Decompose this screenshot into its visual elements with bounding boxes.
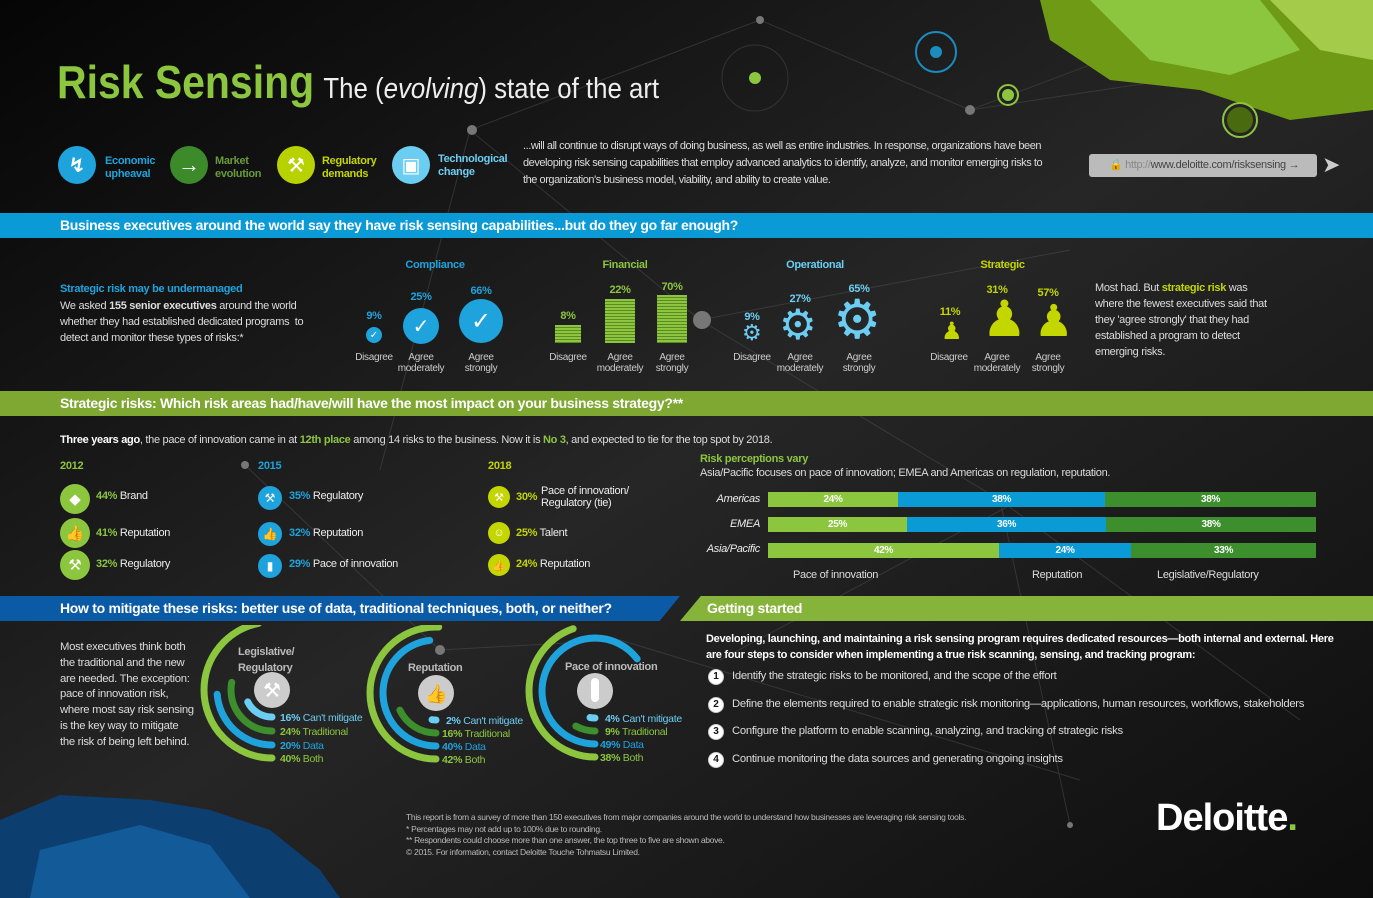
disruptors row: evolution (215, 168, 261, 180)
legislative: Legislative/ (238, 646, 295, 658)
panel: operational: ⚙ (833, 290, 881, 350)
logo: Deloitte: Deloitte. (1156, 797, 1297, 839)
url bar (1089, 154, 1317, 177)
panel: risk perceptions chart: 36% (997, 519, 1016, 530)
panel: 2015 (258, 460, 398, 578)
panel: 2018: 👍 (492, 560, 506, 572)
panel: 2012: 41% Reputation (96, 527, 170, 539)
panel: 2015: 29% Pace of innovation (289, 558, 398, 570)
steps list: Identify the strategic risks to be monitored, and the scope of the effort (732, 670, 1057, 682)
band: business executives: Business executives around the world say they have risk sensing capabilities...but do they go far enough? (60, 217, 738, 233)
panel: risk perceptions chart: Legislative/Regulatory (1157, 569, 1259, 581)
icon: regulatory demands: ⚒ (287, 154, 305, 176)
panel: financial (549, 259, 689, 374)
disruptors row (58, 146, 507, 184)
disruptors row: change (438, 166, 475, 178)
panel: strategic: Agree moderately (974, 352, 1020, 374)
text: most executives: Most executives think both the traditional and the new are needed. The exception: pace of innovation risk, where most say risk sensing is the key way to mitigate the risk of being left behind. (60, 641, 194, 748)
panel: risk perceptions chart: EMEA (730, 518, 760, 530)
panel: strategic: Agree strongly (1032, 352, 1064, 374)
band: getting started (680, 596, 1373, 621)
pace of innovation: Pace of innovation (565, 661, 658, 673)
panel: operational: 27% (789, 293, 811, 305)
panel: compliance: Agree strongly (465, 352, 497, 374)
legislative: 40% Both (280, 753, 324, 765)
panel: strategic: Disagree (930, 352, 968, 363)
panel: 2015: 32% Reputation (289, 527, 363, 539)
disruptors row: Market (215, 155, 249, 167)
panel: risk perceptions chart: 33% (1214, 545, 1233, 556)
panel: risk perceptions chart: Asia/Pacific (707, 543, 760, 555)
band: strategic risks (0, 391, 1373, 416)
panel: risk perceptions chart: Risk perceptions vary (700, 453, 808, 465)
panel: operational: Disagree (733, 352, 771, 363)
panel: 2015: ⚒ (265, 491, 275, 505)
band: business executives (0, 213, 1373, 238)
pace of innovation: 49% Data (600, 739, 644, 751)
panel: 2018: ☺ (493, 527, 505, 539)
chart: mitigation arcs (200, 625, 682, 766)
panel: risk perceptions chart: 42% (874, 545, 893, 556)
panel: 2012: 32% Regulatory (96, 558, 170, 570)
panel: strategic: ♟ (1034, 297, 1073, 346)
steps list: Continue monitoring the data sources and generating ongoing insights (732, 753, 1063, 765)
icon: technological change (392, 146, 430, 184)
panel: strategic: ♟ (941, 318, 962, 345)
steps list (708, 669, 1304, 768)
panel: 2015: ▮ (267, 559, 273, 573)
panel: risk perceptions chart: Asia/Pacific focuses on pace of innovation; EMEA and Americas on regulation, reputation. (700, 467, 1110, 479)
legislative: 16% Can't mitigate (280, 712, 363, 724)
panel: 2015: 2015 (258, 460, 281, 472)
legislative (204, 622, 363, 765)
disruptors row: Technological (438, 153, 507, 165)
reputation: 2% Can't mitigate (446, 715, 523, 727)
panel: compliance: ✓ (471, 308, 491, 334)
decorative blue polygons bottom-left (0, 795, 340, 898)
panel: 2015: 👍 (263, 527, 277, 541)
disruptors row: demands (322, 168, 368, 180)
panel: compliance: Compliance (405, 259, 465, 271)
icon: market evolution (170, 146, 208, 184)
panel: operational: 65% (848, 283, 870, 295)
panel: risk perceptions chart: 24% (1055, 545, 1075, 556)
pace of innovation (529, 625, 682, 764)
panel: financial: Agree strongly (656, 352, 688, 374)
text: strategic risk undermanaged: Strategic risk may be undermanaged (60, 283, 242, 295)
text: strategic note: Most had. But strategic risk was where the fewest executives said that they 'agree strongly' that they had established a program to detect emerging risks. (1095, 282, 1267, 358)
footnotes: This report is from a survey of more than 150 executives from major companies around the world to understand how businesses are leveraging risk sensing tools. (406, 812, 966, 822)
panel: risk perceptions chart (700, 453, 1316, 581)
panel: risk perceptions chart: 38% (1201, 519, 1221, 530)
reputation (370, 627, 523, 766)
band: how to mitigate: How to mitigate these risks: better use of data, traditional techniques, both, or neither? (60, 600, 612, 616)
steps list: Define the elements required to enable strategic risk monitoring—applications, human resources, workflows, stakeholders (732, 698, 1304, 710)
panel: compliance: ✓ (413, 316, 429, 338)
panel: compliance: Agree moderately (398, 352, 444, 374)
reputation: 16% Traditional (442, 728, 510, 740)
panel: financial: 70% (661, 281, 683, 293)
panel: risk perceptions chart: Reputation (1032, 569, 1082, 581)
band: getting started: Getting started (707, 600, 802, 616)
panel: financial: Financial (602, 259, 647, 271)
panel: compliance: 25% (410, 291, 432, 303)
panel: operational: ⚙ (742, 320, 761, 345)
steps list: 2 (713, 699, 719, 710)
panel: risk perceptions chart: Pace of innovation (793, 569, 878, 581)
panel: 2018: 24% Reputation (516, 558, 590, 570)
reputation: 40% Data (442, 741, 486, 753)
panel: 2018: ⚒ (494, 492, 504, 504)
title: Risk Sensing The (evolving) state of the art (57, 56, 659, 108)
panel: financial: Agree moderately (597, 352, 643, 374)
panel: 2018: 30% (516, 491, 537, 503)
panel: 2018: 25% Talent (516, 527, 567, 539)
panel: risk perceptions chart: 25% (828, 519, 847, 530)
panel: 2012: 2012 (60, 460, 83, 472)
reputation: 👍 (425, 683, 447, 704)
legislative: Regulatory (238, 662, 294, 674)
icon: technological change: ▣ (402, 154, 420, 176)
panel: 2018: 2018 (488, 460, 511, 472)
panel: 2018 (488, 460, 630, 576)
legislative: ⚒ (263, 680, 281, 702)
panel: 2012: 44% Brand (96, 490, 148, 502)
icon: regulatory demands (277, 146, 315, 184)
panel: compliance: ✓ (370, 330, 378, 340)
footnotes: © 2015. For information, contact Deloitte Touche Tohmatsu Limited. (406, 846, 640, 856)
panel: risk perceptions chart: 38% (1201, 494, 1220, 505)
panel: 2018: Regulatory (tie) (541, 497, 611, 509)
panel: operational: Agree moderately (777, 352, 823, 374)
intro text: ...will all continue to disrupt ways of doing business, as well as entire industries. In response, organizations have been developing risk sensing capabilities that employ advanced analytics to identify, analyze, and monitor emerging risks to the organization's business model, viability, and ability to create value. (523, 140, 1042, 186)
disruptors row: Economic (105, 155, 155, 167)
steps list: Configure the platform to enable scanning, analyzing, and tracking of strategic risks (732, 725, 1123, 737)
panel: strategic (930, 259, 1073, 374)
panel: 2012: ⚒ (68, 557, 82, 574)
panel: financial: 22% (609, 284, 631, 296)
panel: 2012 (60, 460, 170, 580)
panel: strategic: ♟ (982, 291, 1027, 347)
steps list: 1 (713, 671, 719, 682)
panel: compliance (355, 259, 503, 374)
panel: financial: 8% (560, 310, 576, 322)
panel: strategic: 31% (986, 284, 1008, 296)
pace of innovation: 9% Traditional (605, 726, 667, 738)
panel: 2015: 35% Regulatory (289, 490, 363, 502)
icon: cursor: ➤ (1322, 152, 1340, 177)
panel: 2018: Pace of innovation/ (541, 485, 629, 497)
panel: operational: Agree strongly (843, 352, 875, 374)
disruptors row: Regulatory (322, 155, 376, 167)
panel: operational: ⚙ (779, 301, 816, 348)
panel: strategic: 11% (940, 306, 960, 318)
panel: strategic: 57% (1037, 287, 1059, 299)
reputation: 42% Both (442, 754, 486, 766)
band: strategic risks: Strategic risks: Which risk areas had/have/will have the most impact on your business strategy?** (60, 395, 683, 411)
footnotes: * Percentages may not add up to 100% due to rounding. (406, 824, 602, 834)
icon: market evolution: → (178, 152, 200, 177)
legislative: 20% Data (280, 740, 324, 752)
reputation: Reputation (408, 662, 463, 674)
panel: risk perceptions chart: 38% (992, 494, 1011, 505)
disruptors row: upheaval (105, 168, 150, 180)
panel: operational: 9% (744, 311, 760, 323)
panel: 2012: 👍 (66, 525, 84, 542)
text: three years ago: Three years ago, the pace of innovation came in at 12th place among 14 risks to the business. Now it is No 3, and expected to tie for the top spot by 2018. (60, 434, 772, 446)
footnotes: ** Respondents could choose more than one answer, the top three to five are shown above. (406, 835, 725, 845)
panel: risk perceptions chart: Americas (717, 493, 760, 505)
panel: 2012: ◆ (69, 491, 81, 508)
icon: economic upheaval (58, 146, 96, 184)
panel: financial: Disagree (549, 352, 587, 363)
url bar: 🔒 http://www.deloitte.com/risksensing → (1109, 159, 1299, 171)
footnotes (406, 812, 966, 856)
panel: operational (733, 259, 881, 374)
panel: strategic: Strategic (980, 259, 1025, 271)
decorative green polygons (1040, 0, 1373, 120)
icon: economic upheaval: ↯ (69, 154, 85, 176)
panel: risk perceptions chart: 24% (823, 494, 843, 505)
band: how to mitigate (0, 596, 680, 621)
panel: operational: Operational (786, 259, 844, 271)
text: strategic risk undermanaged: We asked 155 senior executives around the world whether they had established dedicated programs to detect and monitor these types of risks:* (60, 300, 303, 344)
getting started text: Developing, launching, and maintaining a risk sensing program requires dedicated resources—both internal and external. Here are four steps to consider when implementing a true risk scanning, sensing, and tracking program: (706, 633, 1334, 661)
steps list: 3 (713, 726, 719, 737)
panel: compliance: 9% (366, 310, 382, 322)
legislative: 24% Traditional (280, 726, 348, 738)
steps list: 4 (713, 754, 719, 765)
panel: compliance: 66% (470, 285, 492, 297)
pace of innovation: 4% Can't mitigate (605, 713, 682, 725)
pace of innovation: 38% Both (600, 752, 644, 764)
panel: compliance: Disagree (355, 352, 393, 363)
